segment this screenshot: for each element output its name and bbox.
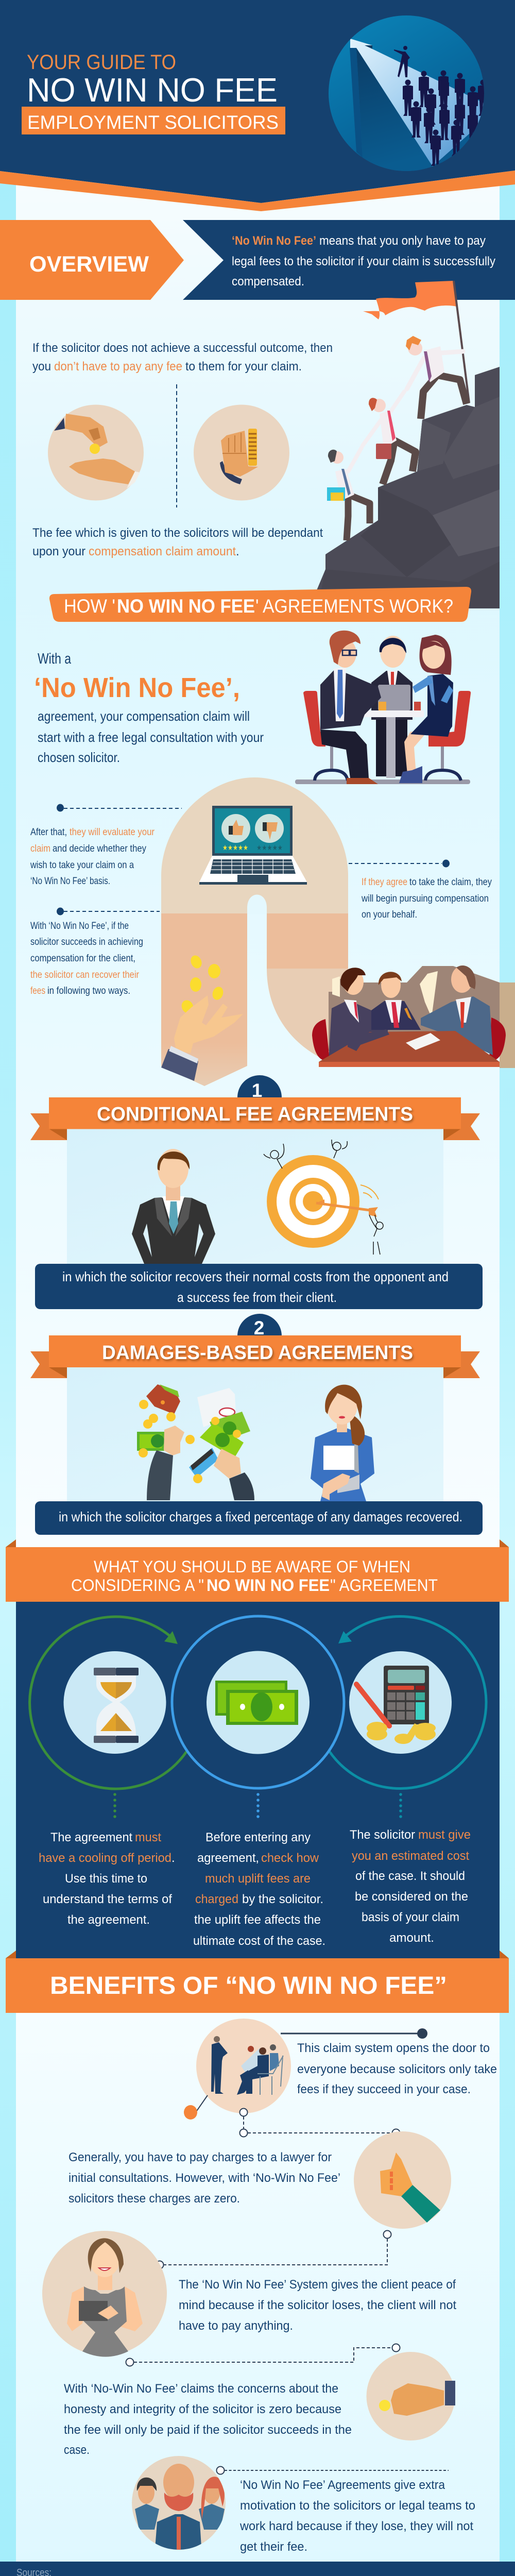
illustration: businessman — [132, 1149, 215, 1264]
person: solicitor with pen — [404, 965, 493, 1055]
heading band: CONSIDERING A " — [71, 1576, 204, 1595]
text: cooling off period: have a cooling off period — [39, 1851, 171, 1865]
ribbon heading: DAMAGES-BASED AGREEMENTS — [102, 1342, 413, 1364]
text: evaluate claim: wish to take your claim on a — [30, 859, 134, 871]
ribbon heading — [30, 1097, 480, 1140]
text: with a no win no fee agreement: With a — [38, 651, 72, 667]
text: cooling off period: understand the terms of — [43, 1892, 172, 1906]
illustration: leader and crowd on an arrow — [329, 15, 489, 178]
connector: recover fees — [57, 908, 160, 915]
number badge 2: 2 — [254, 1317, 264, 1338]
mountain — [309, 367, 500, 608]
icon: laptop with thumbs up and down: ★★★★★ — [256, 844, 283, 852]
title: NO WIN NO FEE — [27, 71, 278, 109]
arch shape — [161, 777, 348, 1086]
heading band: " AGREEMENT — [330, 1576, 438, 1595]
sub-panel — [67, 1129, 443, 1264]
flag pole — [454, 281, 469, 403]
connector: benefit 1 to 2 — [240, 2108, 400, 2137]
illustration: woman holding folder — [311, 1385, 374, 1501]
panel: overview — [0, 220, 515, 300]
text: fee depends on claim: . — [236, 545, 239, 558]
sub-panel — [67, 1367, 443, 1501]
text: mind because if the solicitor loses, the client will not — [179, 2298, 456, 2312]
table and laptop — [358, 685, 424, 778]
text: estimated cost: of the case. It should — [355, 1869, 465, 1883]
icon: thumbs up — [380, 2153, 440, 2223]
climber top — [406, 336, 467, 419]
navy panel — [16, 1600, 500, 1960]
benefit 3: peace of mind — [42, 2231, 456, 2357]
dotted connectors — [113, 1793, 402, 1818]
illustration: woman with tablet — [67, 2238, 143, 2357]
title: YOUR GUIDE TO — [27, 51, 176, 74]
heading: how agreements work — [49, 587, 471, 622]
description box — [35, 1501, 483, 1535]
text: The ‘No Win No Fee’ System gives the client peace of — [179, 2278, 456, 2292]
text: This claim system opens the door to — [297, 2041, 490, 2055]
text — [179, 2278, 456, 2333]
title: EMPLOYMENT SOLICITORS — [27, 112, 279, 133]
text: with a no win no fee agreement — [34, 651, 264, 765]
text: cooling off period: the agreement. — [67, 1913, 150, 1927]
overview definition: compensated. — [232, 275, 304, 289]
icon: banknotes — [215, 1681, 298, 1725]
text: recover fees — [30, 920, 143, 996]
climber middle — [363, 392, 416, 484]
text: pursue compensation — [361, 876, 492, 920]
orange chevron — [0, 171, 515, 211]
text: fee depends on claim — [32, 526, 323, 558]
benefit 1: open to everyone — [184, 2019, 497, 2120]
text: evaluate claim: claim — [30, 843, 50, 854]
text: fee depends on claim: compensation claim amount — [89, 545, 236, 558]
heading: how agreements work: ' AGREEMENTS WORK? — [255, 596, 453, 617]
illustration: hand tossing coins — [161, 954, 243, 1081]
connector: benefit 3 to 4 — [126, 2344, 400, 2366]
ribbon heading: CONDITIONAL FEE AGREEMENTS — [97, 1104, 413, 1125]
heading: how agreements work: HOW ' — [64, 596, 115, 617]
connector: evaluate claim — [57, 804, 182, 812]
text — [239, 2478, 475, 2554]
text: get their fee. — [240, 2540, 307, 2554]
text: cooling off period: The agreement — [50, 1831, 132, 1844]
text — [68, 2150, 340, 2206]
icon: hand with coin — [379, 2381, 455, 2416]
text: estimated cost: be considered on the — [355, 1890, 468, 1904]
text: cooling off period: . — [171, 1851, 175, 1865]
text — [64, 2382, 352, 2457]
text: case. — [64, 2443, 90, 2457]
text: with a no win no fee agreement: ‘No Win No Fee’, — [34, 672, 240, 703]
text: evaluate claim: ‘No Win No Fee’ basis. — [30, 875, 110, 887]
text: estimated cost: must give — [418, 1828, 471, 1842]
text: cooling off period — [39, 1831, 175, 1927]
text: solicitors these charges are zero. — [68, 2192, 240, 2206]
text: uplift fees: the uplift fee affects the — [194, 1913, 321, 1927]
connector: pursue compensation — [349, 859, 450, 868]
text: uplift fees: ultimate cost of the case. — [193, 1934, 325, 1948]
text: evaluate claim: and decide whether they — [53, 843, 146, 854]
text: recover fees: in following two ways. — [47, 985, 130, 996]
figure group — [211, 2036, 283, 2095]
sources panel — [0, 2562, 515, 2576]
person: middle man — [371, 636, 413, 776]
icon: laptop with thumbs up and down — [199, 806, 307, 885]
benefit 2: no consultation charges — [68, 2131, 451, 2229]
illustration: legal consultation meeting — [295, 631, 471, 784]
icon: fist holding coins — [194, 405, 289, 501]
text: pursue compensation: If they agree — [362, 876, 407, 888]
description box: in which the solicitor charges a fixed percentage of any damages recovered. — [59, 1509, 462, 1524]
heading band — [6, 1951, 509, 2013]
panel: benefits background — [16, 2009, 500, 2563]
connector: benefit 2 to 3 — [156, 2231, 391, 2269]
text: no fee if unsuccessful — [32, 341, 333, 374]
text: pursue compensation: on your behalf. — [362, 909, 417, 920]
table — [319, 1031, 500, 1062]
text: uplift fees: check how — [261, 1851, 319, 1865]
overview definition: means that you only have to pay — [319, 234, 486, 248]
ribbon heading — [30, 1335, 480, 1378]
text: estimated cost: amount. — [389, 1931, 434, 1945]
illustration: legal team — [135, 2464, 225, 2555]
text: work hard because if they lose, they will not — [239, 2519, 473, 2533]
text: honesty and integrity of the solicitor is zero because — [64, 2402, 341, 2416]
person: woman — [399, 635, 453, 783]
heading band: WHAT YOU SHOULD BE AWARE OF WHEN — [94, 1557, 410, 1576]
heading: how agreements work: NO WIN NO FEE — [117, 596, 255, 617]
text: cooling off period: Use this time to — [65, 1872, 147, 1886]
overview definition: legal fees to the solicitor if your claim is successfully — [232, 255, 495, 268]
description box: a success fee from their client. — [177, 1290, 337, 1305]
overview definition: ‘No Win No Fee’ — [232, 234, 316, 248]
text: estimated cost — [350, 1828, 471, 1945]
text: evaluate claim — [30, 826, 154, 887]
text: with a no win no fee agreement: start with a free legal consultation with your — [38, 730, 264, 745]
text — [297, 2041, 497, 2096]
text: initial consultations. However, with ‘No-Win No Fee’ — [68, 2171, 340, 2185]
text: recover fees: fees — [30, 985, 45, 996]
illustration: solicitors signing at a table — [312, 965, 515, 1068]
text: estimated cost: you an estimated cost — [352, 1849, 469, 1863]
text: recover fees: compensation for the client, — [30, 953, 135, 964]
icon: calculator, pen and coins — [356, 1666, 436, 1744]
text: with a no win no fee agreement: agreement, your compensation claim will — [38, 708, 250, 724]
number badge 1 — [237, 1075, 282, 1120]
section: damages-based agreements — [30, 1314, 483, 1535]
ring: uplift fees — [172, 1616, 486, 1789]
panel: overview and agreements background — [16, 170, 500, 1551]
person: bespectacled man — [320, 631, 381, 784]
overview label — [0, 220, 184, 300]
text: no fee if unsuccessful: to them for your claim. — [185, 360, 302, 374]
text: recover fees: solicitor succeeds in achieving — [30, 936, 143, 947]
icon: laptop with thumbs up and down: ★★★★★ — [222, 844, 248, 852]
heading band: NO WIN NO FEE — [207, 1576, 330, 1595]
connector dot — [281, 2028, 427, 2039]
text: pursue compensation: will begin pursuing compensation — [361, 893, 489, 904]
number badge 1: 1 — [252, 1080, 262, 1101]
text: ‘No Win No Fee’ Agreements give extra — [240, 2478, 445, 2492]
description box — [35, 1264, 483, 1309]
text: uplift fees: agreement, — [197, 1851, 259, 1865]
text: estimated cost: The solicitor — [350, 1828, 415, 1842]
right leg — [267, 913, 348, 969]
ring: cooling off — [30, 1617, 186, 1789]
text: no fee if unsuccessful: If the solicitor does not achieve a successful outcome, then — [32, 341, 333, 355]
text: fee depends on claim: upon your — [32, 545, 85, 558]
text: evaluate claim: they will evaluate your — [70, 826, 154, 838]
text: no fee if unsuccessful: you — [32, 360, 51, 374]
orange marker — [184, 2095, 208, 2120]
text: uplift fees: by the solicitor. — [242, 1892, 323, 1906]
header panel — [0, 0, 515, 211]
ring: estimated cost — [349, 1651, 452, 1754]
text: Generally, you have to pay charges to a lawyer for — [68, 2150, 332, 2164]
illustration: climbers helping each other to a flag — [327, 281, 469, 540]
text: uplift fees: Before entering any — [205, 1831, 311, 1844]
text: fees if they succeed in your case. — [297, 2082, 471, 2096]
section: benefits — [6, 1951, 509, 2555]
chairs — [303, 691, 471, 781]
text: estimated cost: basis of your claim — [362, 1910, 459, 1924]
person: left man — [329, 968, 388, 1060]
diagram: no win no fee process — [30, 777, 515, 1086]
icon: hourglass — [94, 1668, 139, 1743]
text: have to pay anything. — [179, 2319, 293, 2333]
text: With ‘No-Win No Fee’ claims the concerns about the — [64, 2382, 338, 2396]
number badge 2 — [237, 1314, 282, 1358]
description box: in which the solicitor recovers their normal costs from the opponent and — [62, 1269, 449, 1284]
text: uplift fees — [193, 1831, 325, 1948]
connector — [216, 2467, 449, 2474]
text: recover fees: the solicitor can recover their — [30, 969, 139, 980]
text: uplift fees: charged — [195, 1892, 238, 1906]
text: everyone because solicitors only take — [297, 2062, 497, 2076]
text: with a no win no fee agreement: chosen solicitor. — [38, 750, 120, 765]
section: conditional fee agreements — [30, 1075, 483, 1309]
centre gap — [247, 894, 267, 914]
text: evaluate claim: After that, — [30, 826, 67, 838]
heading band — [6, 1539, 509, 1602]
climber bottom — [327, 448, 370, 540]
left leg — [161, 913, 247, 1086]
section: what to be aware of — [6, 1539, 509, 1960]
text: pursue compensation: to take the claim, they — [409, 876, 492, 888]
text: recover fees: With ‘No Win No Fee’, if the — [30, 920, 129, 931]
text: no fee if unsuccessful: don’t have to pay any fee — [54, 360, 182, 374]
text: cooling off period: must — [135, 1831, 161, 1844]
overview label: OVERVIEW — [29, 252, 149, 277]
flag — [363, 281, 457, 319]
benefit 4: honesty and integrity — [64, 2352, 455, 2457]
title — [22, 51, 285, 134]
text: uplift fees: much uplift fees are — [205, 1872, 311, 1886]
heading band: BENEFITS OF “NO WIN NO FEE” — [50, 1972, 447, 1999]
illustration: wallet, receipt, banknotes and card — [137, 1384, 254, 1500]
text: motivation to the solicitors or legal teams to — [240, 2499, 475, 2513]
text: fee depends on claim: The fee which is given to the solicitors will be dependant — [32, 526, 323, 540]
overview definition — [183, 220, 515, 300]
benefit 5: motivation — [132, 2456, 475, 2555]
illustration: target with arrow — [264, 1140, 383, 1255]
text: the fee will only be paid if the solicitor succeeds in the — [64, 2423, 352, 2437]
person: middle man — [371, 972, 421, 1030]
icon: hand passing coin — [48, 405, 144, 501]
